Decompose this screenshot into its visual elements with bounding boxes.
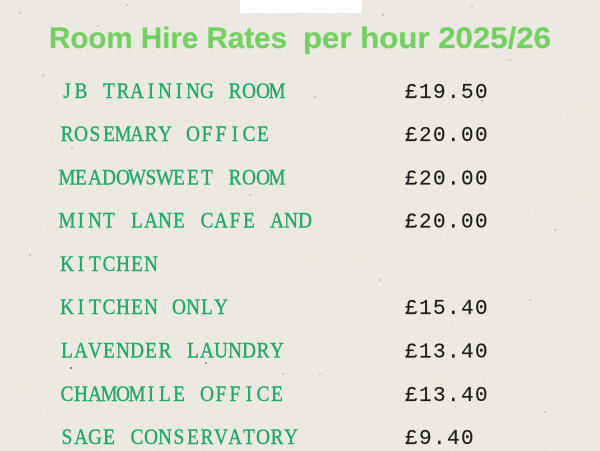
white tab at top xyxy=(240,0,362,13)
row: Kitchen Only: £15.40 xyxy=(405,298,489,321)
row: Chamomile Office xyxy=(61,381,489,408)
row: JB Training Room: £19.50 xyxy=(405,82,489,105)
row: JB Training Room xyxy=(63,78,489,105)
row: Sage Conservatory: SAGE CONSERVATORY xyxy=(62,424,298,449)
rates table xyxy=(58,78,489,451)
title: Room Hire Rates xyxy=(49,22,287,55)
row: Mint Lane Cafe and Kitchen xyxy=(58,207,489,276)
row: Meadowsweet Room: £20.00 xyxy=(405,168,489,192)
row: Mint Lane Cafe and Kitchen: MINT LANE CAFE AND xyxy=(58,207,312,233)
row: Rosemary Office xyxy=(61,121,489,148)
row: Sage Conservatory xyxy=(62,424,475,451)
row: Meadowsweet Room: MEADOWSWEET ROOM xyxy=(58,164,286,190)
title xyxy=(49,22,551,55)
row: Lavender Laundry: £13.40 xyxy=(405,342,489,364)
row: Kitchen Only xyxy=(60,294,489,321)
row: Mint Lane Cafe and Kitchen: KITCHEN xyxy=(60,251,158,276)
row: JB Training Room: JB TRAINING ROOM xyxy=(63,78,286,103)
row: Chamomile Office: £13.40 xyxy=(405,385,489,408)
row: Lavender Laundry xyxy=(61,337,489,364)
row: Lavender Laundry: LAVENDER LAUNDRY xyxy=(61,337,284,363)
row: Sage Conservatory: £9.40 xyxy=(405,428,475,451)
title: per hour 2025/26 xyxy=(303,22,551,55)
row: Mint Lane Cafe and Kitchen: £20.00 xyxy=(405,212,489,234)
row: Meadowsweet Room xyxy=(58,164,489,192)
row: Kitchen Only: KITCHEN ONLY xyxy=(60,294,228,319)
row: Chamomile Office: CHAMOMILE OFFICE xyxy=(61,381,283,406)
row: Rosemary Office: £20.00 xyxy=(405,125,489,148)
row: Rosemary Office: ROSEMARY OFFICE xyxy=(61,121,269,146)
